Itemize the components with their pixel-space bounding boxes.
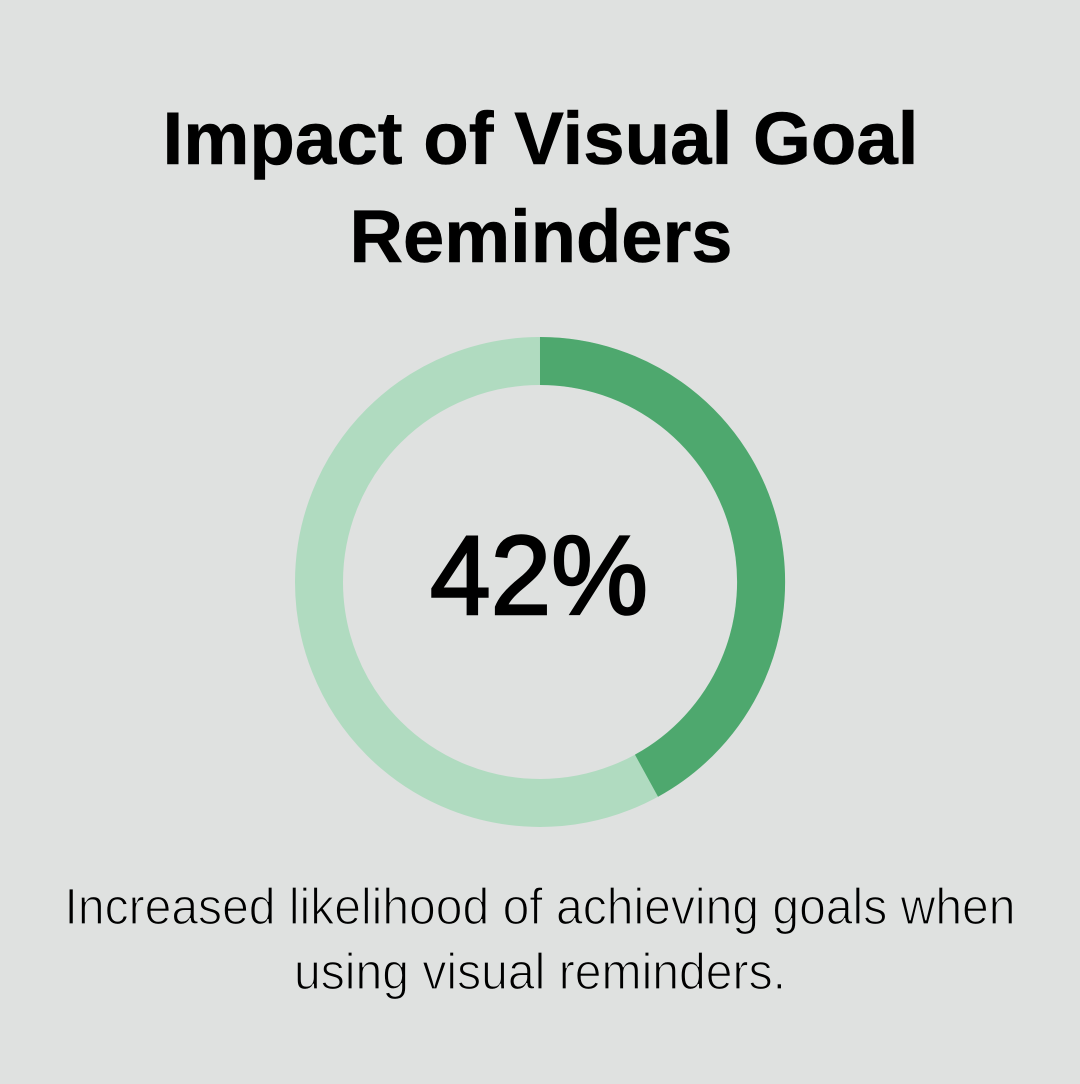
donut value segment xyxy=(540,361,761,776)
caption xyxy=(64,878,1016,1000)
donut chart: 42% xyxy=(319,361,761,803)
donut track xyxy=(319,361,761,803)
center percentage: 42% xyxy=(430,513,648,638)
caption: Increased likelihood of achieving goals when xyxy=(64,878,1016,935)
title xyxy=(162,97,918,278)
caption: using visual reminders. xyxy=(294,943,786,1000)
title: Impact of Visual Goal xyxy=(162,97,918,180)
title: Reminders xyxy=(350,195,732,278)
